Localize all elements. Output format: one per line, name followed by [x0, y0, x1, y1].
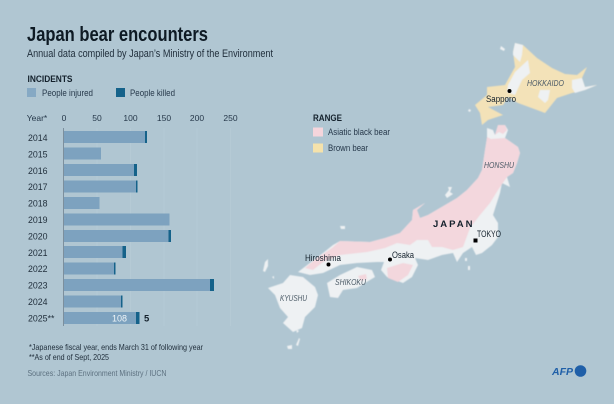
Honshu [298, 125, 520, 283]
2025 value labels: 108 [112, 314, 127, 324]
year labels: 2014 [28, 133, 48, 143]
map of Japan [263, 43, 597, 349]
city labels: Sapporo [486, 94, 516, 104]
year labels: 2017 [28, 182, 48, 192]
year labels: 2019 [28, 215, 48, 225]
year labels: 2018 [28, 198, 48, 208]
Shikoku [327, 267, 375, 298]
year labels: 2016 [28, 166, 48, 176]
small islands [263, 187, 470, 349]
region labels: HONSHU [484, 161, 514, 170]
AFP logo: AFP [551, 366, 574, 378]
city labels: TOKYO [477, 229, 501, 239]
region labels [280, 79, 564, 303]
legend: incidents: INCIDENTS [28, 74, 72, 85]
year labels: 2022 [28, 264, 48, 274]
legend: range: Brown bear [328, 143, 368, 153]
bar chart: incidents per year: 5 [144, 314, 150, 324]
region labels: KYUSHU [280, 294, 307, 303]
legend: range: Asiatic black bear [328, 127, 390, 137]
injured bars [64, 131, 210, 324]
city markers [326, 89, 512, 266]
footnotes [29, 342, 203, 362]
subtitle: Annual data compiled by Japan’s Ministry of the Environment [27, 48, 273, 60]
year labels: 2023 [28, 280, 48, 290]
Hokkaido [468, 43, 597, 125]
axis labels: 50 [92, 113, 102, 123]
region labels: SHIKOKU [335, 278, 366, 287]
axis labels: 250 [223, 113, 238, 123]
year labels [28, 133, 55, 324]
legend: incidents: People injured [42, 88, 93, 98]
axis labels: 200 [190, 113, 204, 123]
killed bars [114, 131, 214, 324]
legend: range: RANGE [313, 113, 342, 124]
region labels: HOKKAIDO [527, 79, 564, 88]
footnotes: **As of end of Sept, 2025 [29, 352, 109, 362]
Kyushu [268, 275, 318, 332]
legend: incidents [27, 74, 175, 98]
axis labels: 0 [62, 113, 67, 123]
city labels: Osaka [392, 250, 414, 260]
axis labels: 150 [157, 113, 171, 123]
sources: Sources: Japan Environment Ministry / IUCN [28, 368, 166, 378]
footnotes: *Japanese fiscal year, ends March 31 of following year [29, 342, 203, 352]
title: Japan bear encounters [27, 24, 208, 46]
bar chart: incidents per year [27, 113, 238, 326]
year labels: 2020 [28, 232, 48, 242]
country label: JAPAN [433, 219, 474, 230]
legend: incidents: People killed [130, 88, 175, 98]
year labels: 2025** [28, 314, 55, 324]
year labels: 2024 [28, 297, 48, 307]
AFP logo [551, 365, 586, 378]
legend: range [313, 113, 390, 153]
axis labels: Year* [27, 113, 48, 123]
year labels: 2015 [28, 150, 48, 160]
city labels [305, 94, 516, 263]
city labels: Hiroshima [305, 253, 341, 263]
axis labels [27, 113, 238, 123]
year labels: 2021 [28, 248, 48, 258]
axis labels: 100 [123, 113, 138, 123]
